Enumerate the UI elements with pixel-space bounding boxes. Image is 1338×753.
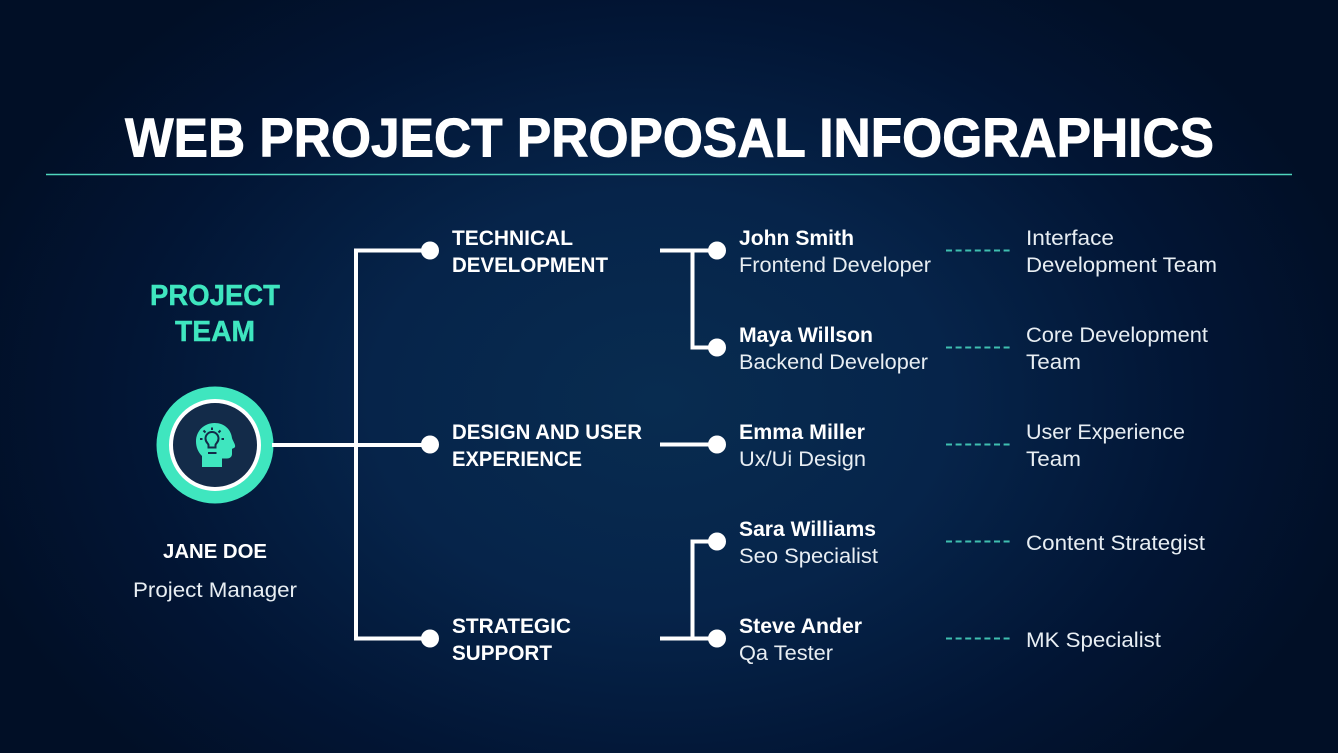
dashed connectors	[946, 250, 1011, 638]
category: technical development: DEVELOPMENT	[452, 254, 608, 277]
team: content strategist: Content Strategist	[1026, 531, 1205, 555]
team: core development	[1026, 323, 1208, 374]
category: strategic support: SUPPORT	[452, 642, 552, 665]
title: WEB PROJECT PROPOSAL INFOGRAPHICS	[125, 106, 1214, 168]
person: Sara Williams: Seo Specialist	[739, 544, 878, 568]
person: Emma Miller: Emma Miller	[739, 421, 865, 444]
heading: project team	[150, 280, 280, 348]
category: design and user experience	[452, 421, 642, 471]
team: interface development: Interface	[1026, 226, 1114, 250]
person: John Smith: Frontend Developer	[739, 253, 931, 277]
team: user experience	[1026, 420, 1185, 471]
team: user experience: User Experience	[1026, 420, 1185, 444]
person: Steve Ander: Qa Tester	[739, 641, 833, 665]
category: design and user experience: DESIGN AND USER	[452, 421, 642, 444]
category: strategic support	[452, 615, 571, 665]
category: strategic support: STRATEGIC	[452, 615, 571, 638]
connector: strategic branch	[660, 532, 726, 648]
person: Sara Williams	[739, 518, 878, 568]
connector: technical branch	[660, 242, 726, 356]
person: Steve Ander	[739, 615, 862, 665]
person: John Smith: John Smith	[739, 227, 854, 250]
person: Maya Willson: Maya Willson	[739, 324, 873, 347]
category: design and user experience: EXPERIENCE	[452, 448, 582, 471]
category: technical development: TECHNICAL	[452, 227, 573, 250]
icon: head with light bulb in ring	[156, 386, 274, 504]
person: Emma Miller	[739, 421, 866, 471]
person: Maya Willson: Backend Developer	[739, 350, 928, 374]
connector: main tree	[272, 242, 439, 648]
team: interface development: Development Team	[1026, 253, 1217, 277]
connector: design branch	[660, 436, 726, 454]
category: technical development	[452, 227, 608, 277]
person: John Smith	[739, 227, 931, 277]
person: Steve Ander: Steve Ander	[739, 615, 862, 638]
team: core development: Team	[1026, 350, 1081, 374]
team: core development: Core Development	[1026, 323, 1208, 347]
heading: project team: PROJECT	[150, 280, 280, 312]
team: MK specialist: MK Specialist	[1026, 628, 1161, 652]
team: user experience: Team	[1026, 447, 1081, 471]
heading: project team: TEAM	[175, 316, 255, 348]
role: Project Manager: Project Manager	[133, 578, 297, 602]
name: Jane Doe: JANE DOE	[163, 540, 267, 563]
panel: project team lead	[133, 280, 297, 602]
person: Maya Willson	[739, 324, 928, 374]
person: Emma Miller: Ux/Ui Design	[739, 447, 866, 471]
person: Sara Williams: Sara Williams	[739, 518, 876, 541]
team: interface development	[1026, 226, 1217, 277]
